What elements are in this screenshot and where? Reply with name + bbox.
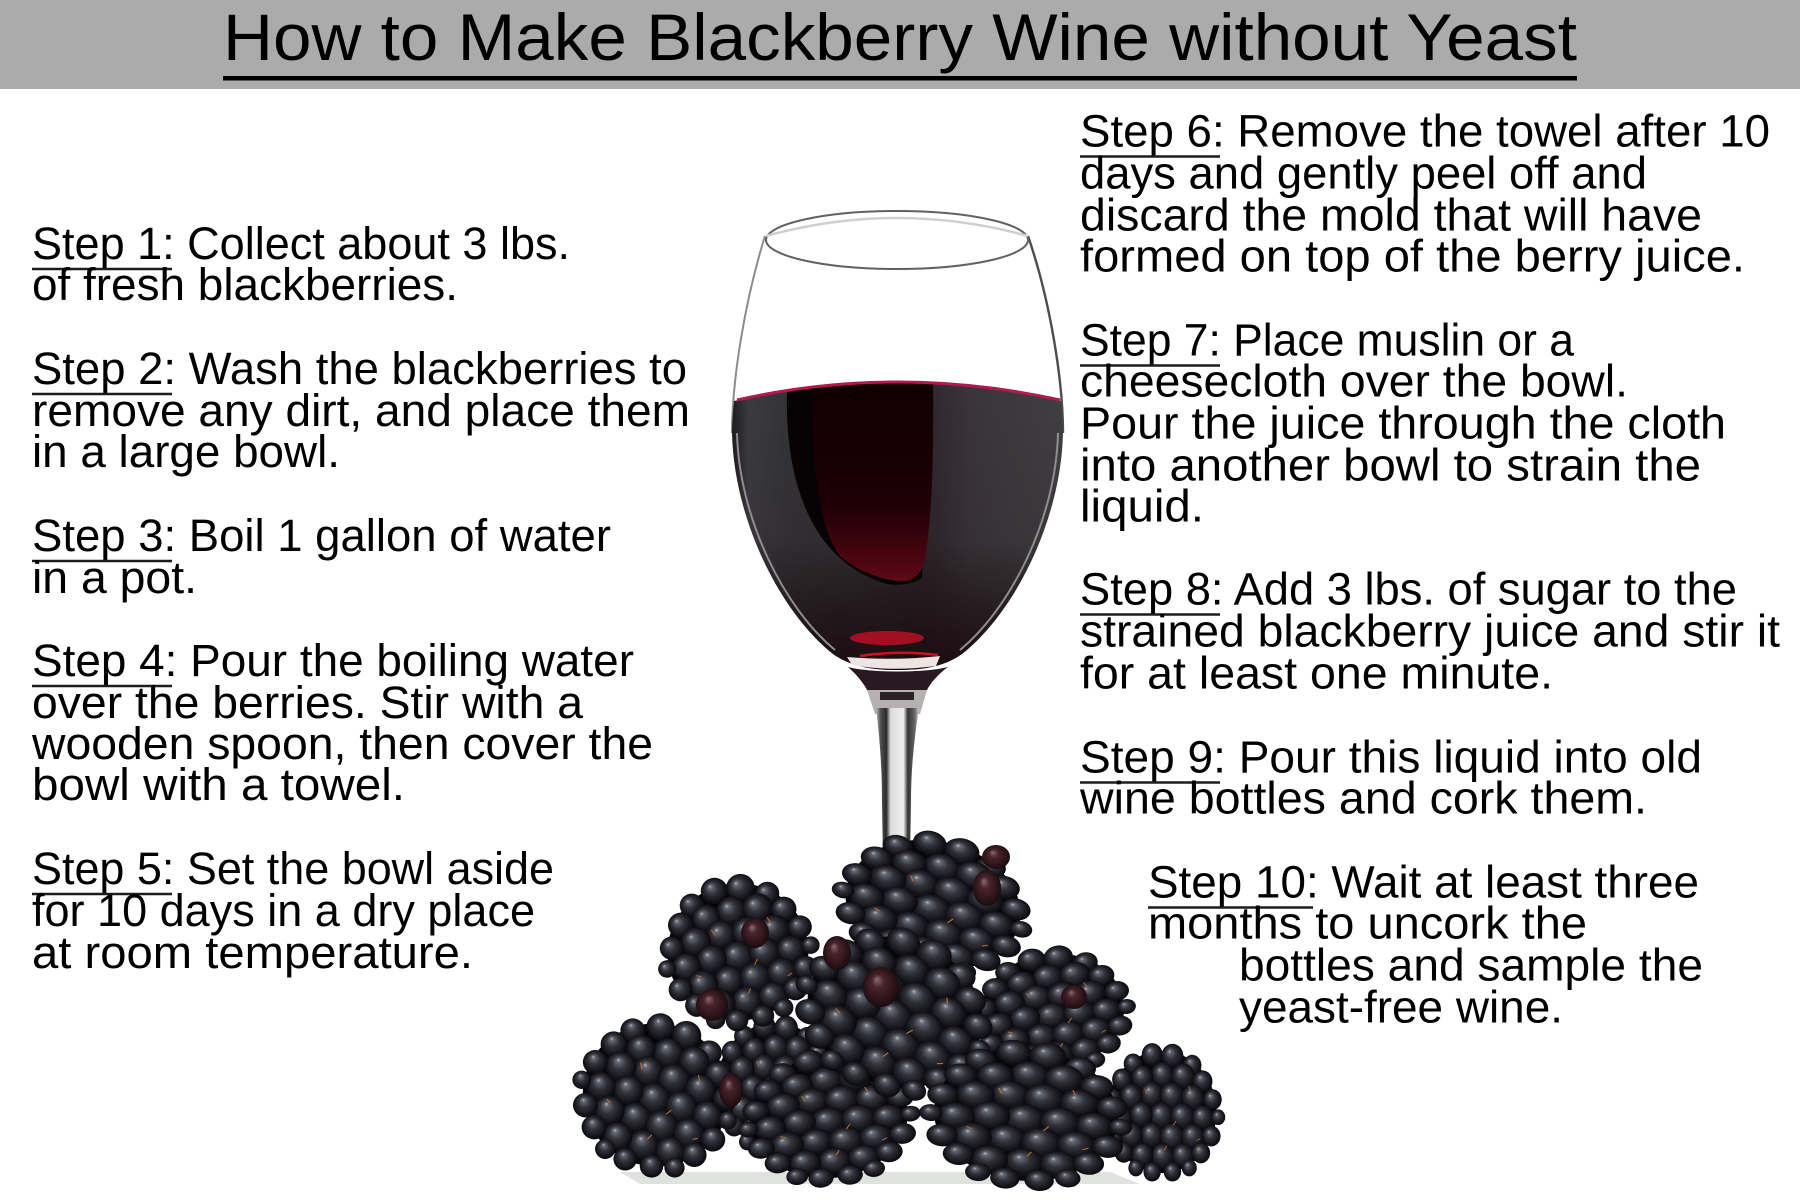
- step 7: Pour the juice through the cloth: [1080, 398, 1726, 448]
- step 2: Step 2: Wash the blackberries to: [32, 343, 687, 394]
- step 7: cheesecloth over the bowl.: [1080, 356, 1628, 406]
- step 9: wine bottles and cork them.: [1079, 772, 1647, 824]
- step 3: Step 3: Boil 1 gallon of water: [32, 510, 611, 561]
- header band: [0, 0, 1800, 89]
- blackberry: bottom right: [914, 1034, 1138, 1197]
- glass bowl: [732, 236, 1063, 689]
- step 7: into another bowl to strain the: [1080, 440, 1701, 490]
- step 7: liquid.: [1080, 480, 1204, 532]
- blackberries: [553, 813, 1225, 1197]
- wine core: [813, 383, 933, 581]
- glass neck: [848, 667, 948, 690]
- title: How to Make Blackberry Wine without Yeast: [223, 0, 1577, 74]
- wine dark band: [787, 382, 933, 585]
- stem: [876, 708, 919, 862]
- wine lower shading: [732, 382, 1063, 670]
- step 4: [31, 635, 653, 810]
- blackberry: right middle: [960, 935, 1144, 1089]
- step 8: Step 8: Add 3 lbs. of sugar to the: [1080, 564, 1737, 614]
- blackberry: top: [818, 813, 1048, 997]
- glass right edge: [1028, 236, 1063, 433]
- blackberry: hidden filler: [707, 1015, 843, 1156]
- blackberry: bottom centre: [731, 1039, 927, 1196]
- step 4: over the berries. Stir with a: [32, 677, 584, 728]
- right column: steps 6-10: [1079, 106, 1781, 1032]
- table shadow: [620, 1172, 1140, 1184]
- glass inner edges: [737, 433, 1058, 650]
- step 5: Step 5: Set the bowl aside: [32, 843, 554, 894]
- blackberry: lower left: [553, 995, 759, 1196]
- step 6: Step 6: Remove the towel after 10: [1080, 106, 1770, 156]
- white highlight: [847, 656, 940, 669]
- step 5: for 10 days in a dry place: [32, 885, 535, 936]
- step 10: yeast-free wine.: [1239, 982, 1563, 1032]
- step 8: strained blackberry juice and stir it: [1080, 606, 1781, 656]
- step 3: in a pot.: [32, 552, 197, 603]
- step 10: Step 10: Wait at least three: [1148, 856, 1699, 908]
- glass rim: [766, 211, 1028, 269]
- step 2: remove any dirt, and place them: [32, 385, 690, 436]
- step 6: discard the mold that will have: [1080, 190, 1702, 240]
- blackberry: far right: [1099, 1043, 1225, 1182]
- step 9: Step 9: Pour this liquid into old: [1080, 732, 1702, 782]
- step 6: formed on top of the berry juice.: [1080, 230, 1745, 282]
- step 10: months to uncork the: [1148, 898, 1587, 948]
- step 6: days and gently peel off and: [1080, 148, 1647, 198]
- left column: steps 1-5: [31, 218, 690, 978]
- step 4: bowl with a towel.: [32, 759, 405, 810]
- step 10: [1148, 856, 1703, 1032]
- step 1: of fresh blackberries.: [32, 259, 458, 310]
- step 10: bottles and sample the: [1239, 940, 1703, 990]
- step 2: in a large bowl.: [32, 426, 340, 477]
- step 1: [32, 218, 570, 310]
- step 4: Step 4: Pour the boiling water: [32, 635, 634, 686]
- step 7: Step 7: Place muslin or a: [1080, 314, 1575, 366]
- unripe drupelets: [696, 845, 1087, 1107]
- step 2: [32, 343, 690, 477]
- red reflection: [850, 631, 924, 645]
- step 5: at room temperature.: [32, 927, 473, 978]
- step 9: [1079, 732, 1702, 824]
- step 7: [1080, 314, 1726, 532]
- step 6: [1080, 106, 1770, 282]
- step 4: wooden spoon, then cover the: [31, 718, 653, 769]
- step 8: for at least one minute.: [1080, 648, 1553, 698]
- wine surface line: [737, 382, 1060, 400]
- glass left edge: [732, 236, 765, 433]
- wine glass: [732, 211, 1063, 862]
- wine body: [732, 382, 1063, 670]
- step 5: [32, 843, 554, 978]
- blackberry: centre: [769, 899, 1021, 1126]
- step 8: [1080, 564, 1781, 698]
- step 3: [32, 510, 611, 603]
- blackberry: upper left: [644, 862, 832, 1043]
- step 1: Step 1: Collect about 3 lbs.: [32, 218, 570, 269]
